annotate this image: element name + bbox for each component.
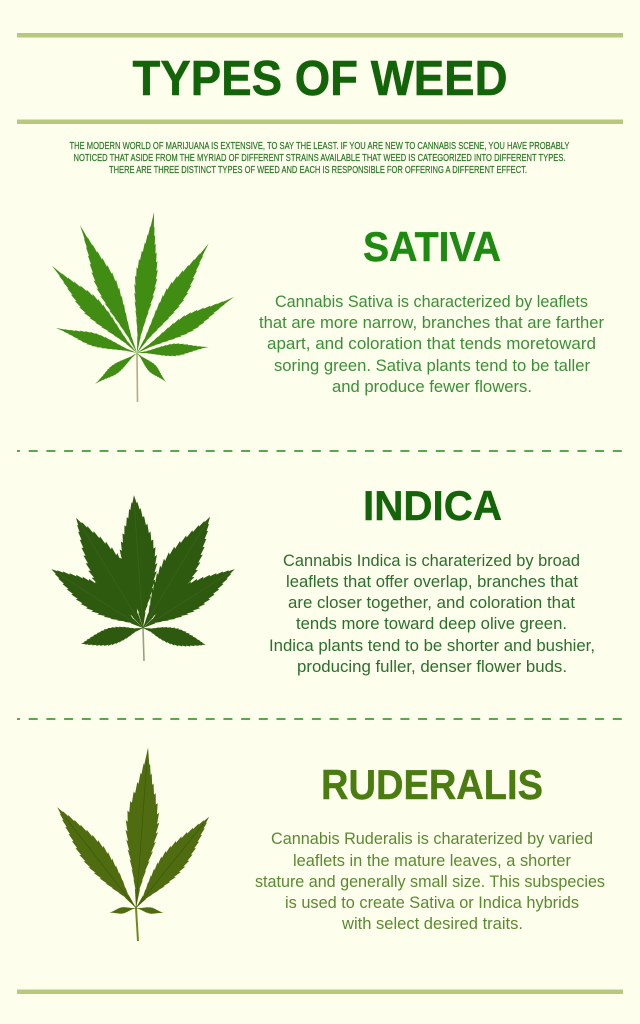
description: indica: producing fuller, denser flower buds. xyxy=(297,657,567,676)
panel: indica xyxy=(44,482,595,676)
description: sativa: Cannabis Sativa is characterized by leaflets xyxy=(275,292,588,311)
description: sativa: that are more narrow, branches that are farther xyxy=(259,313,604,332)
description: indica: are closer together, and coloration that xyxy=(288,593,575,612)
description: indica xyxy=(269,551,595,676)
description: ruderalis: is used to create Sativa or Indica hybrids xyxy=(285,893,579,912)
title rule xyxy=(17,120,623,124)
description: ruderalis: Cannabis Ruderalis is charaterized by varied xyxy=(271,829,593,848)
panel: sativa xyxy=(45,211,604,402)
description: sativa: and produce fewer flowers. xyxy=(332,377,532,396)
description: indica: Cannabis Indica is charaterized by broad xyxy=(283,551,580,570)
intro text xyxy=(70,140,570,176)
bottom rule xyxy=(17,990,623,994)
description: indica: tends more toward deep olive green. xyxy=(296,614,567,633)
top rule xyxy=(17,33,623,38)
description: ruderalis: stature and generally small size. This subspecies xyxy=(255,872,605,891)
description: sativa xyxy=(259,292,604,396)
description: ruderalis: leaflets in the mature leaves, a shorter xyxy=(293,851,571,870)
panel: ruderalis xyxy=(47,746,605,941)
description: ruderalis xyxy=(255,829,605,933)
description: sativa: apart, and coloration that tends moretoward xyxy=(267,334,596,353)
description: sativa: soring green. Sativa plants tend to be taller xyxy=(274,356,590,375)
icon: sativa leaf xyxy=(45,211,238,402)
heading: ruderalis: RUDERALIS xyxy=(321,761,543,808)
description: indica: Indica plants tend to be shorter and bushier, xyxy=(269,636,595,655)
icon: indica leaf xyxy=(44,494,242,661)
description: indica: leaflets that offer overlap, branches that xyxy=(286,572,578,591)
title: TYPES OF WEED xyxy=(132,52,508,106)
heading: indica: INDICA xyxy=(363,482,502,529)
icon: ruderalis leaf xyxy=(47,746,219,941)
description: ruderalis: with select desired traits. xyxy=(341,914,523,933)
heading: sativa: SATIVA xyxy=(363,223,501,270)
